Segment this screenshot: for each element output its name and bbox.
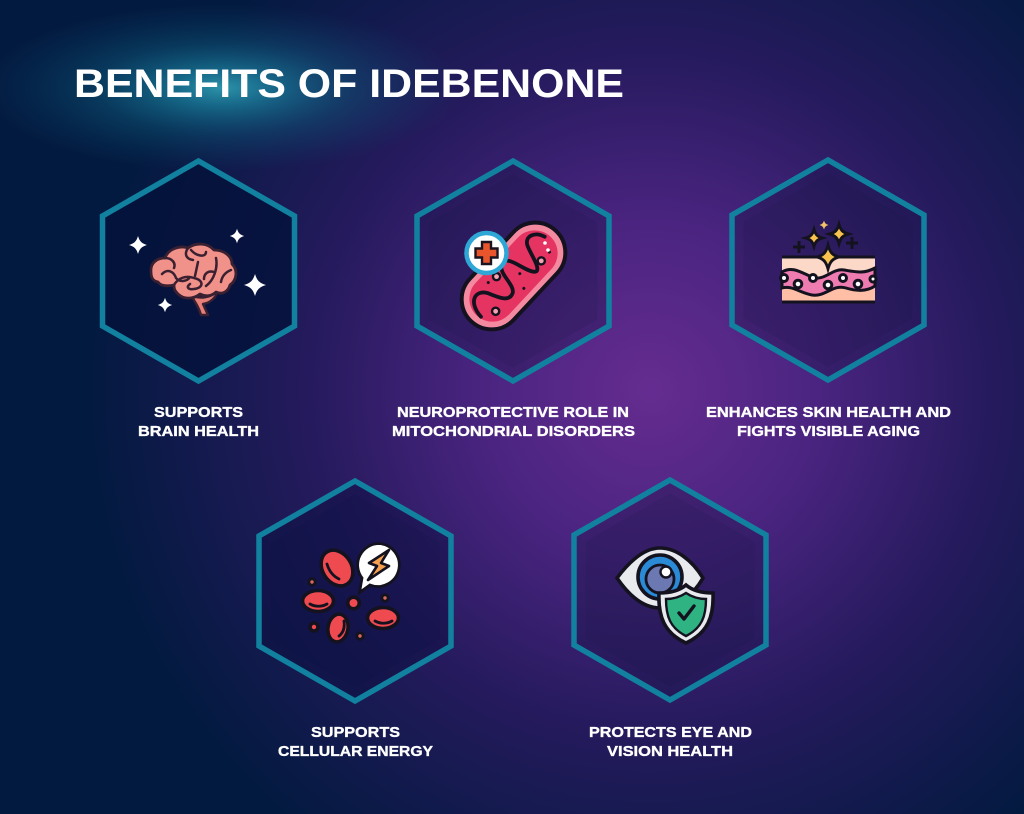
label: supports cellular energy: CELLULAR ENERGY (278, 744, 433, 760)
hexagon frame: brain health (102, 161, 294, 381)
panel: brain health (102, 161, 294, 440)
title: BENEFITS OF IDEBENONE (74, 62, 624, 106)
icon: brain with sparkles (129, 229, 266, 315)
icon: skin layers with sparkles (780, 220, 876, 302)
label: neuroprotective role: NEUROPROTECTIVE ROLE IN (397, 405, 629, 421)
label: enhances skin health (706, 405, 951, 440)
label: neuroprotective role (392, 405, 635, 440)
hexagon frame: eye and vision health (574, 480, 766, 700)
panel: skin health (706, 160, 951, 440)
label: protects eye and vision health: VISION HEALTH (607, 744, 733, 760)
icon: mitochondrion with medical cross (449, 210, 578, 342)
hexagon frame: mitochondrial disorders (417, 161, 609, 381)
icon: eye with shield (617, 548, 713, 643)
panel: eye and vision health (574, 480, 766, 760)
icon: red blood cells with energy bubble (302, 544, 399, 644)
label: neuroprotective role: MITOCHONDRIAL DISORDERS (392, 424, 635, 440)
label: protects eye and vision health (589, 725, 752, 760)
panel: cellular energy (259, 481, 451, 760)
label: supports brain health: BRAIN HEALTH (138, 424, 259, 440)
label: supports cellular energy: SUPPORTS (311, 725, 400, 741)
label: protects eye and vision health: PROTECTS EYE AND (589, 725, 752, 741)
hexagon frame: skin health (732, 160, 924, 380)
label: enhances skin health: ENHANCES SKIN HEALTH AND (706, 405, 951, 421)
label: supports brain health: SUPPORTS (154, 405, 243, 421)
label: supports brain health (138, 405, 259, 440)
label: supports cellular energy (278, 725, 433, 760)
panel: mitochondrial disorders (392, 161, 635, 440)
label: enhances skin health: FIGHTS VISIBLE AGING (737, 424, 920, 440)
hexagon frame: cellular energy (259, 481, 451, 701)
title glow (0, 4, 462, 172)
